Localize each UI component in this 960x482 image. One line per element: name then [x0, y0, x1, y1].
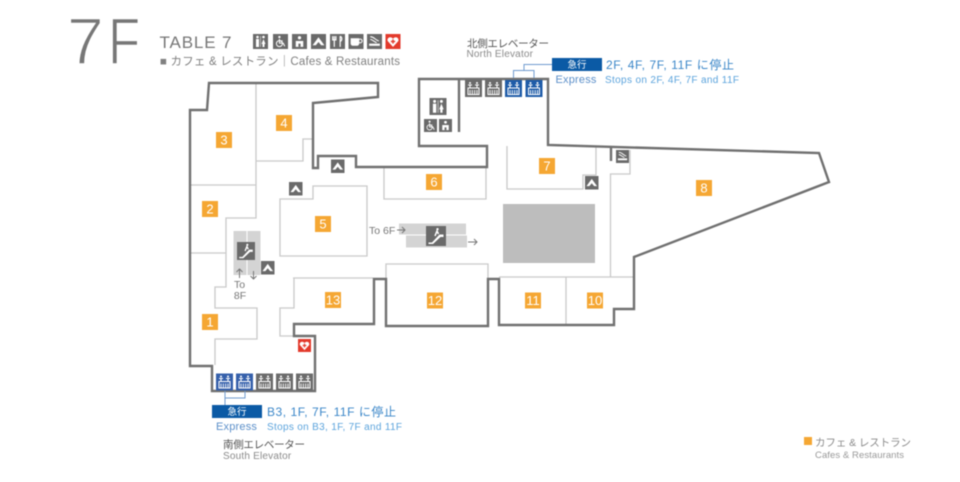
south express callout: Stops on B3, 1F, 7F and 11F	[267, 422, 402, 433]
south express callout: Express	[216, 421, 257, 433]
east escalator to 6F: To 6F	[369, 225, 395, 237]
west escalator to 8F: To	[234, 279, 245, 291]
shop number badges	[202, 115, 712, 330]
shop number badges: 10	[588, 293, 602, 308]
outer walls	[190, 79, 829, 391]
floor number heading: F	[108, 4, 140, 78]
north express callout: Stops on 2F, 4F, 7F and 11F	[605, 75, 739, 86]
north express callout: 2F, 4F, 7F, 11F に停止	[606, 58, 734, 72]
shop number badges: 12	[428, 293, 442, 308]
shop number badges: 4	[280, 116, 288, 131]
subtitle: cafes and restaurants: ■ カフェ & レストラン｜Cafes & Restaurants	[160, 54, 400, 68]
shop number badges: 2	[206, 202, 214, 217]
shop number badges: 6	[430, 175, 438, 190]
shop number badges: 13	[326, 293, 340, 308]
north elevator label	[466, 37, 549, 60]
south express callout: B3, 1F, 7F, 11F に停止	[267, 405, 396, 419]
shop number badges: 8	[700, 181, 708, 196]
south elevator label: South Elevator	[223, 451, 292, 462]
west escalator to 8F	[234, 231, 260, 302]
south elevator label: 南側エレベーター	[223, 438, 305, 451]
north express callout: Express	[556, 74, 597, 86]
legend: cafes and restaurants: カフェ & レストラン	[815, 437, 911, 449]
north elevator label: North Elevator	[466, 49, 534, 60]
facility icon row	[253, 34, 400, 49]
legend: cafes and restaurants: Cafes & Restaurants	[815, 450, 904, 461]
east escalator to 6F	[369, 224, 477, 248]
void: central grey atrium	[503, 204, 595, 263]
shop number badges: 7	[543, 159, 551, 174]
legend: cafes and restaurants	[804, 437, 911, 461]
south elevators	[216, 374, 313, 390]
north express callout: 急行	[567, 59, 587, 71]
shop number badges: 11	[526, 293, 540, 308]
floor number heading	[67, 4, 140, 78]
shop partition lines	[191, 83, 633, 365]
shop number badges: 5	[319, 217, 327, 232]
title: TABLE 7: TABLE 7	[160, 33, 232, 52]
south elevator label	[223, 438, 305, 462]
south express callout	[212, 391, 402, 433]
cloakroom and facility icons	[261, 98, 629, 352]
north elevators	[465, 80, 542, 97]
shop number badges: 1	[206, 315, 214, 330]
header: shop category title	[160, 33, 400, 68]
south express callout: 急行	[227, 406, 247, 418]
west escalator to 8F: 8F	[234, 290, 246, 302]
north elevator label: 北側エレベーター	[467, 37, 549, 50]
floor plan	[190, 79, 829, 391]
north express callout	[514, 58, 739, 86]
shop number badges: 3	[220, 133, 228, 148]
floor number heading: 7	[67, 4, 104, 78]
